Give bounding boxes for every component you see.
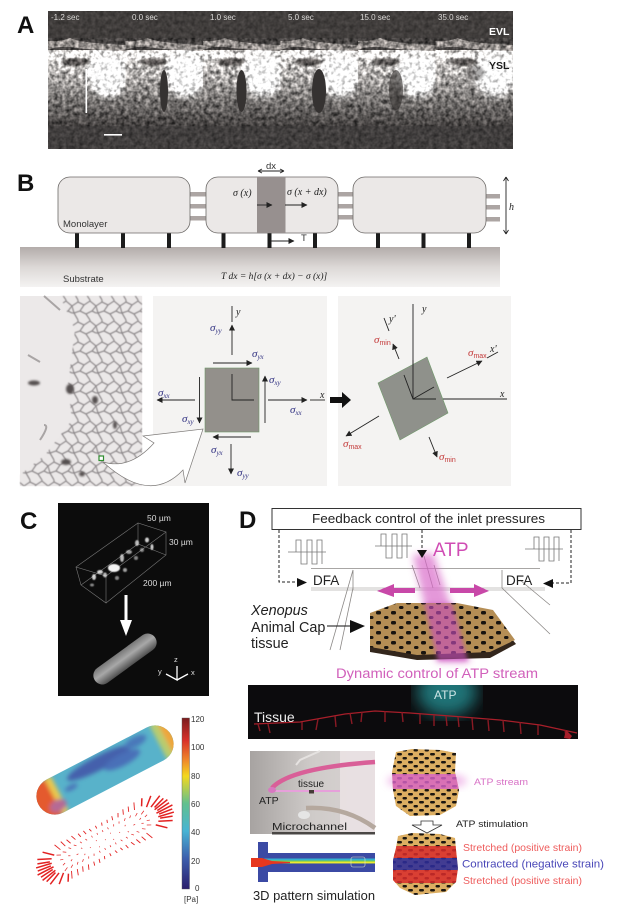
stress labels: σ <box>237 467 242 479</box>
dashed arrowheads <box>297 550 553 588</box>
labels: Substrate <box>63 274 104 285</box>
arrow: ATP stimulation <box>412 819 528 833</box>
arrow: transformation <box>330 392 351 408</box>
arrow to tissue <box>327 625 352 627</box>
time labels: 35.0 sec <box>438 13 468 22</box>
stress labels: yy <box>241 472 250 480</box>
stress labels: σ <box>211 444 216 456</box>
panel label B: B <box>17 170 34 197</box>
frame tone overlays <box>48 11 513 149</box>
principal labels: max <box>473 353 487 360</box>
tissue before stimulation <box>387 748 528 818</box>
time labels: 0.0 sec <box>132 13 158 22</box>
device photograph: ATP <box>259 795 279 807</box>
principal labels: max <box>348 444 362 451</box>
rotated axes <box>413 304 507 399</box>
stress labels: xx <box>294 409 303 417</box>
panel: principal stress diagram: x <box>499 389 505 400</box>
panel: stress tensor diagram <box>153 296 327 486</box>
stress labels: σ <box>252 348 257 360</box>
color scale bar: 20 <box>191 857 200 866</box>
panel B: monolayer force diagram: σ (x) <box>233 188 252 199</box>
principal labels: min <box>444 457 456 464</box>
DFA labels: DFA <box>313 573 339 588</box>
dimension labels: 200 µm <box>143 578 172 588</box>
color scale bar: 40 <box>191 828 200 837</box>
labels <box>63 161 307 285</box>
principal labels: min <box>379 340 391 347</box>
traction force vectors <box>28 787 182 893</box>
tissue after stimulation: Stretched (positive strain) <box>463 875 582 887</box>
time labels: 15.0 sec <box>360 13 390 22</box>
fluorescence image <box>248 685 578 739</box>
panel label A: A <box>17 12 34 39</box>
stress labels: σ <box>290 404 295 416</box>
axes <box>166 666 188 680</box>
stress labels: xy <box>273 379 282 387</box>
tissue block <box>370 603 516 660</box>
Xenopus tissue label: tissue <box>251 636 289 652</box>
dimension labels: 30 µm <box>169 537 193 547</box>
labels: dx <box>266 161 276 172</box>
panel C: 3D image reconstruction <box>58 503 209 696</box>
principal labels: σ <box>468 347 473 359</box>
channel <box>271 790 340 792</box>
cell 3 <box>353 177 486 233</box>
labels: T <box>301 233 307 244</box>
stress labels: yx <box>215 449 224 457</box>
color scale bar: 120 <box>191 715 205 724</box>
cell 2 <box>206 177 338 233</box>
panel: principal stress diagram: y' <box>388 314 396 325</box>
magenta flow arrows <box>377 584 489 597</box>
substrate anchors <box>75 233 471 248</box>
cell monolayer micrograph <box>20 296 142 486</box>
cell 1 <box>58 177 190 233</box>
stream caption: Dynamic control of ATP stream <box>336 666 538 681</box>
waveforms <box>288 534 563 564</box>
stress labels: xy <box>186 418 195 426</box>
panel D: microfluidic feedback schematic <box>250 508 581 681</box>
Xenopus tissue label: Animal Cap <box>251 620 325 636</box>
strain labels: Stretched (positive strain) <box>463 842 582 854</box>
panel C: 3D image reconstruction: z <box>174 655 178 664</box>
principal labels <box>343 334 487 464</box>
down arrow <box>120 595 132 636</box>
YSL label: YSL <box>489 60 510 72</box>
stress arrows <box>157 306 325 474</box>
stress square <box>205 368 259 432</box>
time labels: 1.0 sec <box>210 13 236 22</box>
pink tube <box>272 762 375 788</box>
color scale bar: 60 <box>191 800 200 809</box>
rotated square <box>378 357 448 440</box>
color scale bar: [Pa] <box>184 895 198 904</box>
panel label D: D <box>239 507 256 534</box>
time labels: 5.0 sec <box>288 13 314 22</box>
ATP label: ATP <box>433 540 469 561</box>
panel C: 3D image reconstruction: x <box>191 668 195 677</box>
marker: selected region <box>99 456 104 460</box>
color scale bar: 80 <box>191 772 200 781</box>
device photograph: Microchannel <box>272 821 347 833</box>
stress labels: σ <box>269 374 274 386</box>
Xenopus tissue label: Xenopus <box>250 603 308 619</box>
principal labels: σ <box>439 451 444 463</box>
stress labels: yx <box>256 353 265 361</box>
meshed capsule <box>90 630 160 688</box>
color scale bar: 0 <box>195 884 200 893</box>
dimension labels <box>143 513 193 588</box>
panel D: microfluidic feedback schematic: DFA <box>506 573 532 588</box>
red tissue outline <box>254 711 577 733</box>
ATP stream over tissue <box>424 603 468 661</box>
panel: stress tensor diagram: y <box>235 307 241 318</box>
tissue after stimulation: Contracted (negative strain) <box>462 858 604 870</box>
EVL label: EVL <box>489 26 510 38</box>
traction color map capsule <box>36 725 174 815</box>
labels: Monolayer <box>63 219 107 230</box>
arrow: ATP stimulation: ATP stimulation <box>456 819 528 830</box>
fluorescent signal <box>90 538 154 586</box>
micrograph frames <box>48 11 516 149</box>
dx element <box>257 177 286 233</box>
panel B: monolayer force diagram: σ (x + dx) <box>287 187 327 198</box>
stress labels: σ <box>158 387 163 399</box>
photo labels: tissue <box>298 779 325 790</box>
panel B: monolayer force diagram: T dx = h[σ (x + dx) − σ (x)] <box>221 271 328 282</box>
tissue after stimulation <box>390 832 604 897</box>
wireframe box <box>76 523 166 603</box>
principal labels: σ <box>374 334 379 346</box>
ATP image label: ATP <box>434 688 456 702</box>
Xenopus tissue label <box>250 603 325 652</box>
feedback control box <box>272 508 581 530</box>
ablated dark holes <box>160 65 484 113</box>
dimension labels: 50 µm <box>147 513 171 523</box>
principal arrows <box>346 318 498 457</box>
scale bar <box>104 134 122 136</box>
arrow: zoom from micrograph to diagram <box>103 429 203 486</box>
panel B: monolayer force diagram <box>20 161 514 287</box>
tan tube <box>306 808 375 828</box>
force arrows <box>257 169 508 241</box>
panel: principal stress diagram: x' <box>489 344 497 355</box>
cell junctions <box>190 192 500 222</box>
panel B: monolayer force diagram: h <box>509 202 514 213</box>
stress labels <box>158 322 303 480</box>
principal labels: σ <box>343 438 348 450</box>
simulation caption: 3D pattern simulation <box>253 888 375 903</box>
time labels: -1.2 sec <box>51 13 79 22</box>
stress labels: σ <box>210 322 215 334</box>
flow simulation <box>251 842 375 903</box>
stress labels: yy <box>214 327 223 335</box>
substrate <box>20 247 500 287</box>
panel: stress tensor diagram: x <box>319 390 325 401</box>
white ablation line <box>86 69 87 113</box>
feedback dashed lines <box>279 530 571 583</box>
channel lines <box>311 556 550 650</box>
device photograph <box>250 751 375 834</box>
panel C: 3D image reconstruction: y <box>158 667 162 676</box>
stress labels: σ <box>182 413 187 425</box>
panel A: time-lapse microscopy strip <box>48 11 516 149</box>
stress labels: xx <box>162 392 171 400</box>
panel: principal stress diagram <box>338 296 511 486</box>
ATP stream <box>413 553 470 662</box>
panel: principal stress diagram: y <box>421 304 427 315</box>
teal ATP glow <box>417 668 477 716</box>
feedback control box: Feedback control of the inlet pressures <box>312 511 546 526</box>
panel label C: C <box>20 508 37 535</box>
color scale bar: 100 <box>191 743 205 752</box>
time labels <box>51 14 468 20</box>
Tissue image label: Tissue <box>254 709 295 725</box>
ATP stream label: ATP stream <box>474 777 528 788</box>
color scale bar <box>182 715 205 904</box>
